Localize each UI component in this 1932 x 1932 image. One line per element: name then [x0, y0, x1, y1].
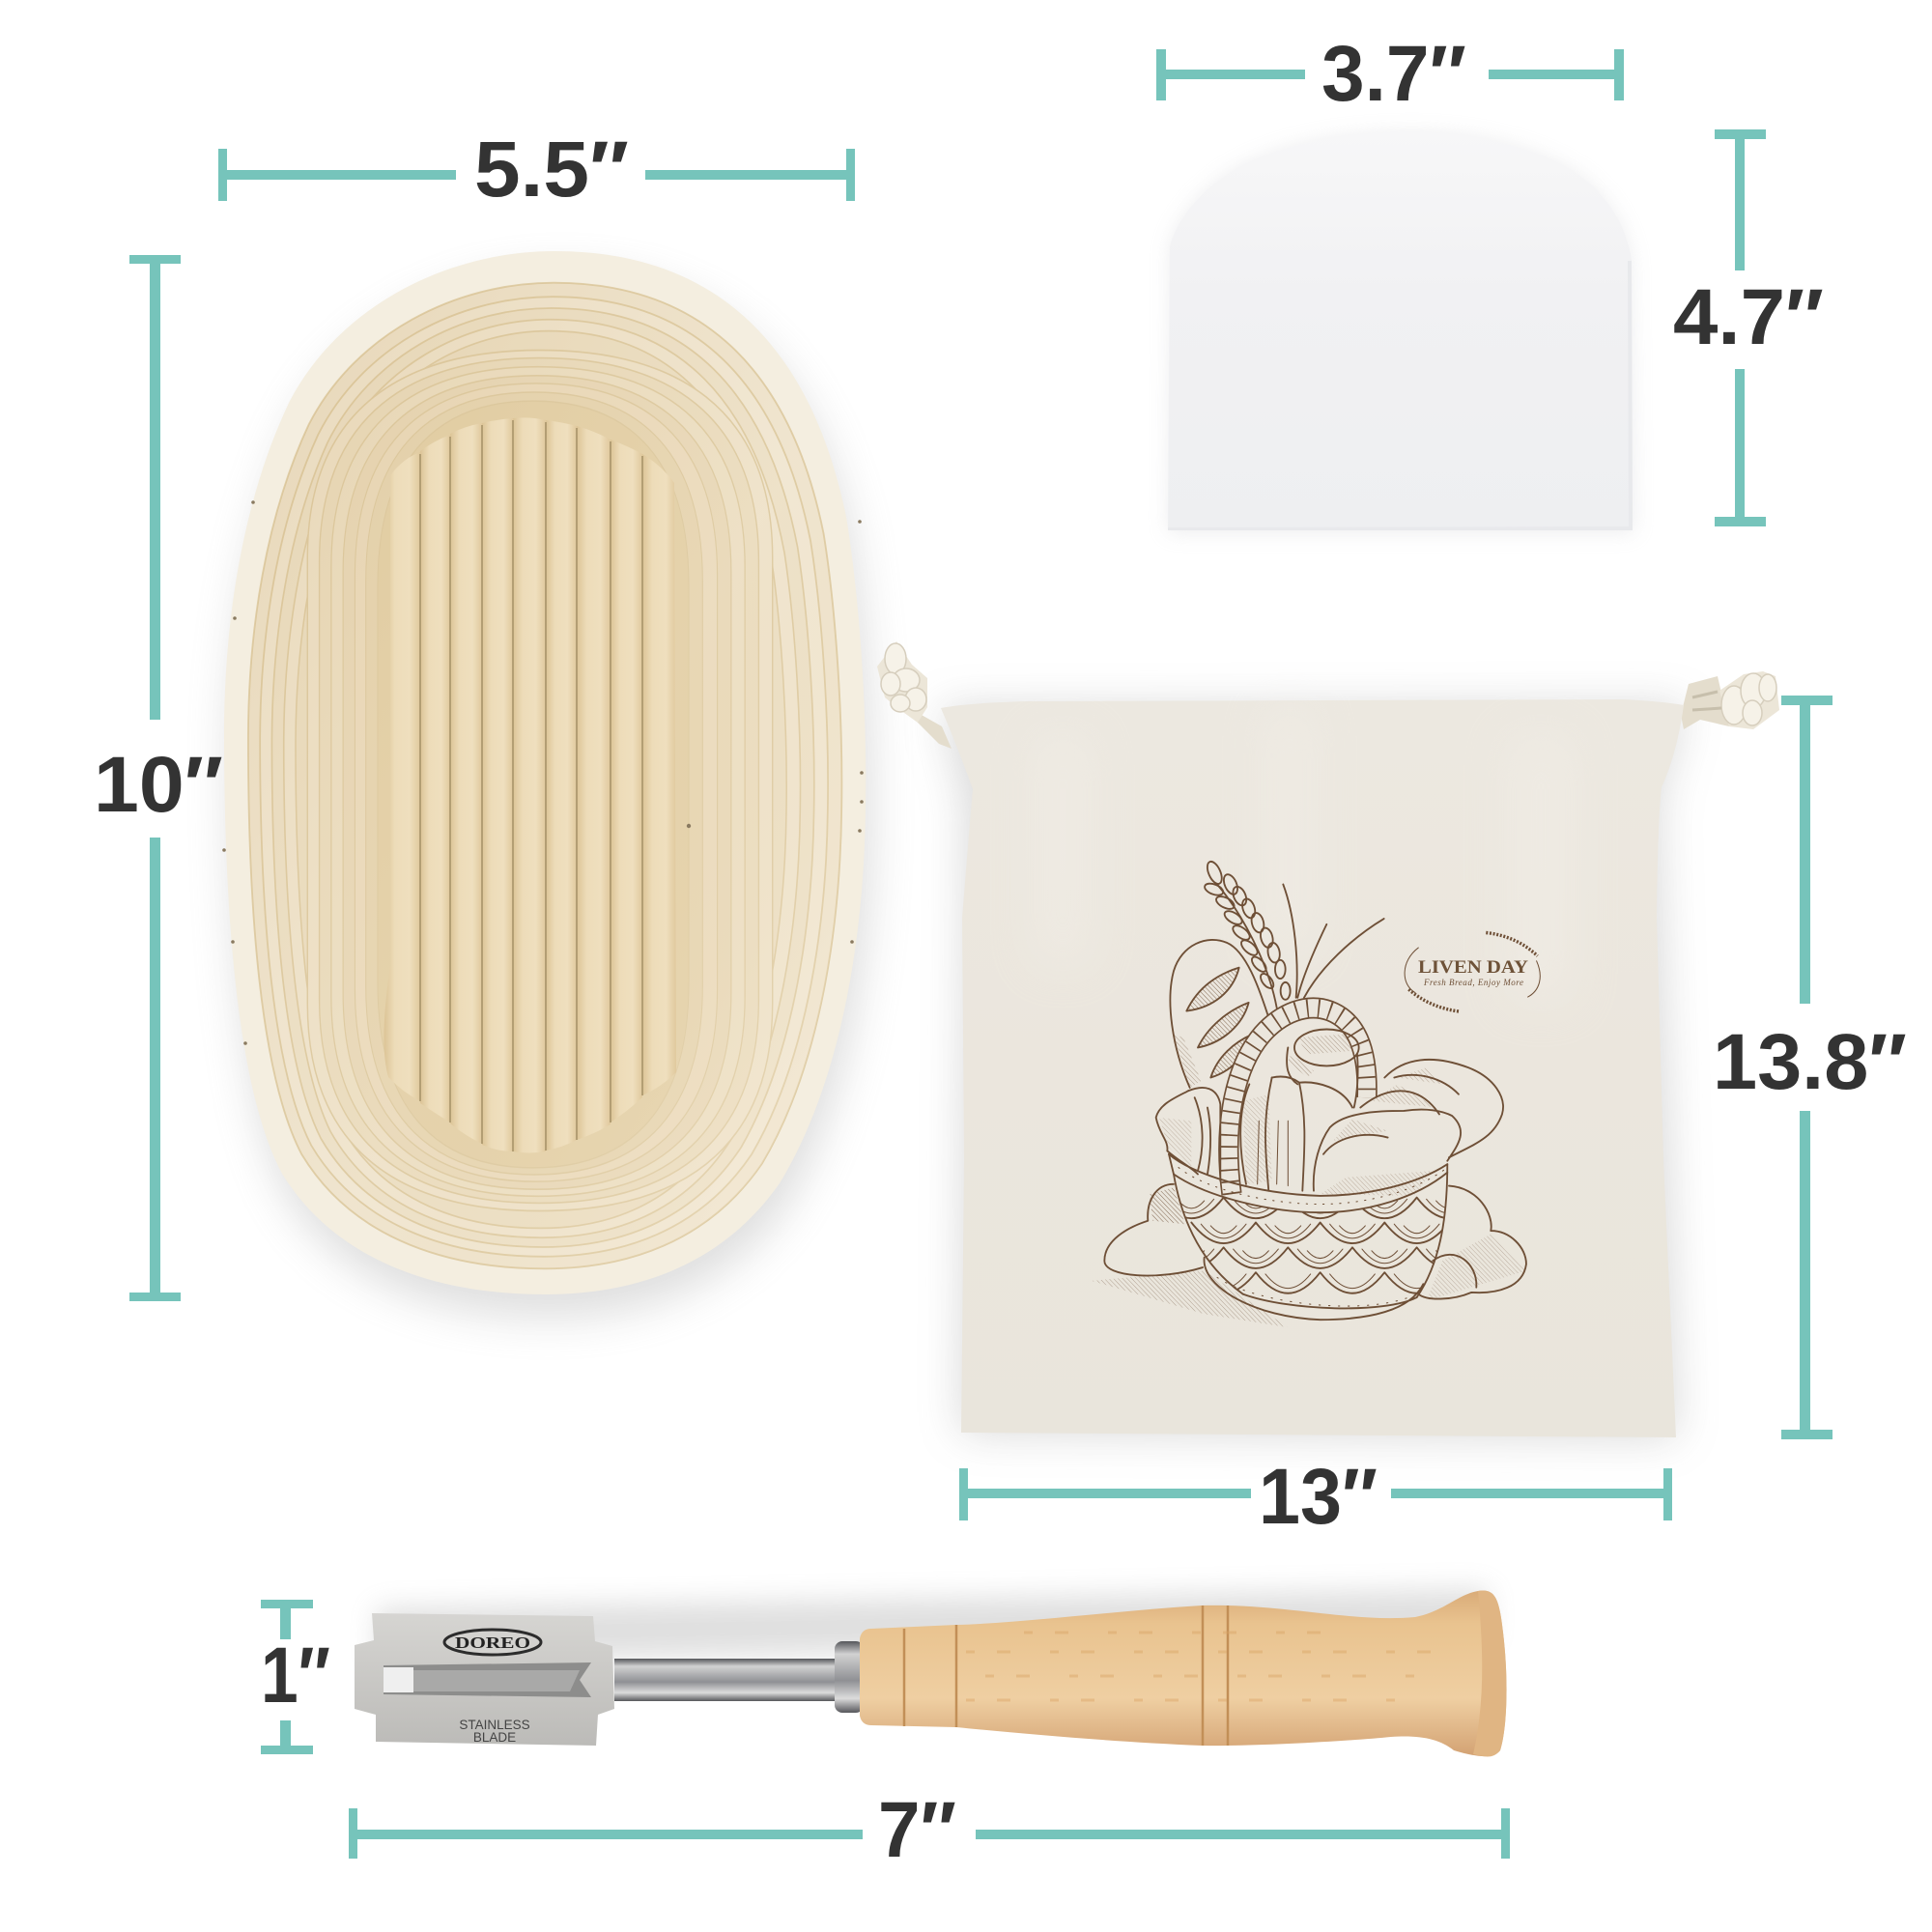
panel: linen bread bag: [877, 641, 1779, 1437]
handle wood grain: [966, 1633, 1449, 1700]
croissant and centre bread: [1156, 1077, 1352, 1191]
rolls on right: [1314, 1060, 1503, 1196]
handle end shading: [1473, 1591, 1507, 1756]
bag folds: [1034, 705, 1575, 1005]
dimension: basket height 10: [94, 255, 223, 1301]
dimension: scraper width 3.7: [1156, 30, 1624, 118]
dimension: blade height 1: 1″: [261, 1632, 330, 1719]
dimension: bag width 13: [959, 1453, 1672, 1541]
lame razor blade: [355, 1613, 614, 1746]
dimension: bag height 13.8: 13.8″: [1713, 1018, 1907, 1106]
logo tagline: Fresh Bread, Enjoy More: [1423, 978, 1523, 987]
round bread behind handle: [1287, 1030, 1359, 1108]
dimension: lame length 7: 7″: [878, 1786, 956, 1874]
side loaves and ground hatching: [1092, 1184, 1526, 1327]
handle grooves: [904, 1605, 1228, 1746]
bag fabric: [941, 699, 1684, 1437]
lame steel rod: [614, 1659, 838, 1701]
lame razor blade: DOREO: [455, 1634, 530, 1652]
dimension: bag height 13.8: [1713, 696, 1907, 1439]
dimension: scraper height 4.7: [1673, 129, 1824, 526]
basket interior shading: [248, 283, 841, 1268]
dimension: lame length 7: [349, 1786, 1510, 1874]
wheat ear: [1204, 860, 1384, 1008]
dimension: basket width 5.5: 5.5″: [474, 126, 629, 213]
logo text: LIVEN DAY: LIVEN DAY: [1418, 957, 1528, 978]
icon: left drawstring knot: [877, 641, 952, 749]
lame razor blade: BLADE: [473, 1730, 516, 1745]
scraper bevel edge: [1168, 261, 1633, 530]
basket coiled rings: [248, 283, 841, 1268]
long loaf: [1170, 940, 1268, 1088]
icon: right drawstring knot: [1681, 671, 1779, 729]
panel: dough scraper: [1168, 132, 1634, 533]
dimension: scraper width 3.7: 3.7″: [1321, 30, 1466, 118]
lame razor blade: STAINLESS: [459, 1718, 530, 1732]
basket handle: [1229, 1009, 1367, 1194]
woven basket body: [1168, 1153, 1449, 1321]
panel: banneton basket: [222, 251, 871, 1318]
basket rim staple dots: [222, 500, 864, 1045]
LIVEN DAY logo: [1405, 933, 1540, 1011]
panel: bread lame: [355, 1589, 1507, 1756]
dimension: basket width 5.5: [218, 126, 855, 213]
lame wooden handle: [860, 1591, 1507, 1756]
dimension: bag width 13: 13″: [1259, 1453, 1378, 1541]
dimension: scraper height 4.7: 4.7″: [1673, 273, 1824, 361]
dimension: blade height 1: [261, 1600, 330, 1754]
bag print: bread basket illustration: [1092, 860, 1540, 1327]
dimension: basket height 10: 10″: [94, 741, 223, 829]
basket outer rim: [224, 251, 866, 1294]
lame collar: [835, 1641, 864, 1713]
basket base slats: [384, 417, 676, 1152]
